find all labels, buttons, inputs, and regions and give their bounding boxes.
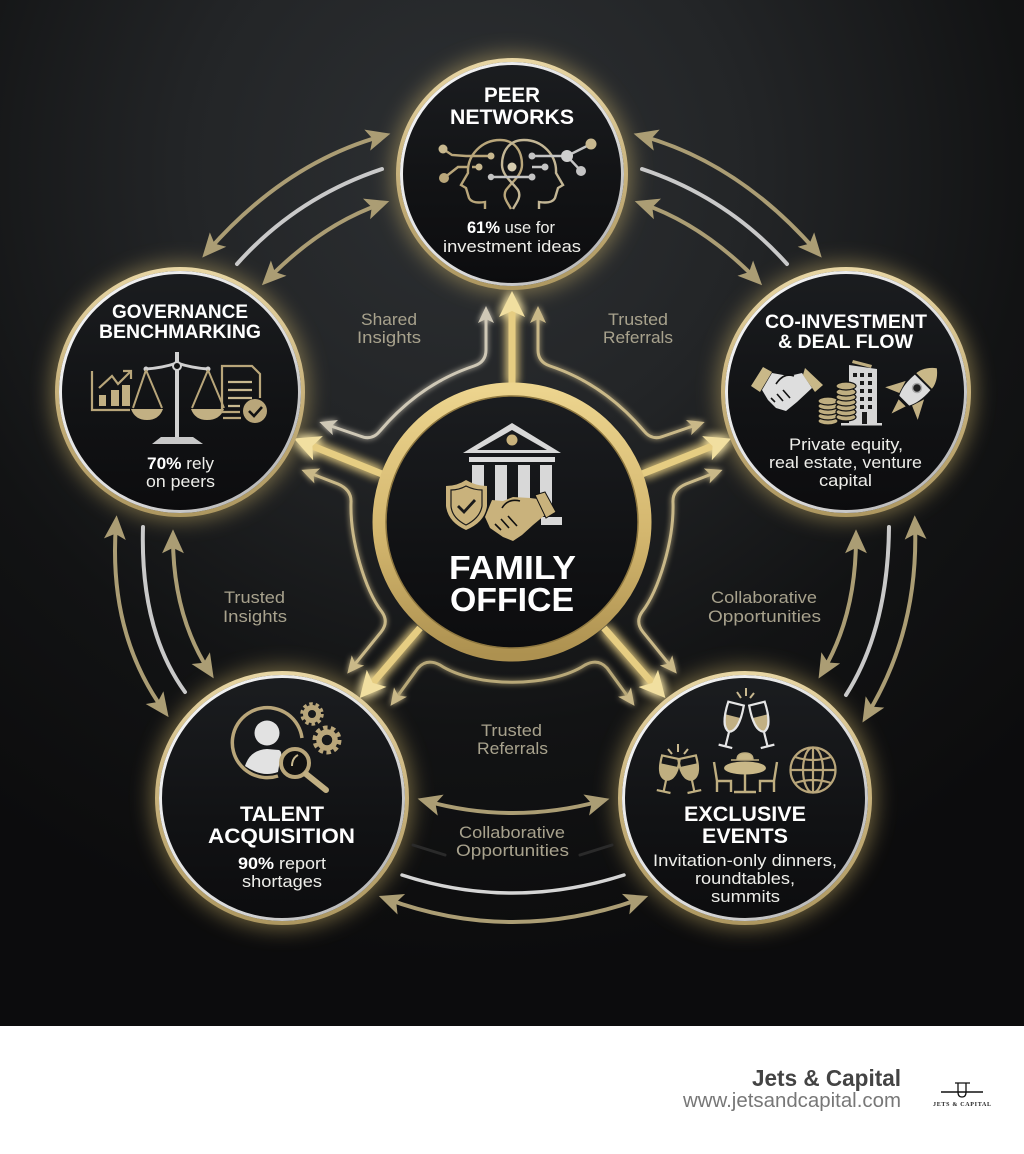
- label: trusted referrals bottom: [477, 722, 548, 758]
- stat: 90%: [238, 855, 326, 891]
- heading: exclusive events: [684, 803, 806, 848]
- icon: office building: [841, 360, 882, 426]
- icon: coin stacks: [818, 382, 856, 425]
- icon: shield with check: [446, 480, 487, 530]
- heading: governance benchmarking: GOVERNANCE: [112, 302, 248, 323]
- panel: family office hub: [380, 390, 644, 654]
- stat: 90%: 90% report: [238, 855, 326, 873]
- stat: 70%: 70% rely: [147, 455, 215, 473]
- label: trusted referrals top: Referrals: [603, 329, 673, 347]
- icon: gold handshake: [485, 492, 556, 541]
- arrows: talent acquisition to exclusive events: [387, 801, 640, 922]
- label: trusted referrals top: Trusted: [608, 311, 668, 329]
- label: trusted insights: Insights: [223, 608, 287, 626]
- footer band: [0, 1026, 1024, 1154]
- secondary arrow: bottom route: [394, 662, 631, 701]
- panel: governance benchmarking: [57, 269, 303, 515]
- secondary arrow: shared insights route: [325, 312, 486, 438]
- panel: co-investment and deal flow: [723, 269, 969, 515]
- heading: co-investment and deal flow: CO-INVESTMENT: [765, 312, 927, 333]
- stat: 61%: 61% use for: [467, 219, 556, 237]
- secondary arrow: trusted referrals route: [538, 312, 699, 438]
- heading: talent acquisition: [208, 803, 355, 848]
- label: trusted referrals bottom: Referrals: [477, 740, 548, 758]
- label: trusted referrals bottom: Trusted: [481, 722, 542, 740]
- heading: talent acquisition: ACQUISITION: [208, 825, 355, 848]
- icon: balance scales: [131, 352, 224, 444]
- text: event types: [653, 852, 837, 906]
- heading: talent acquisition: TALENT: [240, 803, 324, 826]
- heading: exclusive events: EXCLUSIVE: [684, 803, 806, 826]
- icon: handshake: [751, 367, 823, 411]
- panel: peer networks: [398, 60, 626, 288]
- arrows: governance benchmarking to talent acquisition: [115, 524, 209, 710]
- heading: co-investment and deal flow: & DEAL FLOW: [778, 332, 913, 353]
- heading: co-investment and deal flow: [765, 312, 927, 353]
- icon: two heads network: [438, 138, 596, 209]
- icon: document with check: [222, 366, 267, 423]
- icon: person with magnifier and gears: [232, 704, 340, 790]
- label: trusted insights: Trusted: [224, 589, 285, 607]
- stat: 61%: investment ideas: [443, 238, 581, 256]
- heading: exclusive events: EVENTS: [702, 825, 788, 848]
- footer logo: [933, 1083, 991, 1108]
- footer brand text: [682, 1065, 901, 1112]
- panel: exclusive events: [620, 673, 870, 923]
- label: shared insights: Shared: [361, 311, 417, 329]
- heading: peer networks: [450, 84, 574, 129]
- label: collaborative opportunities right: [708, 589, 821, 626]
- arrows: peer networks to co-investment: [642, 136, 816, 279]
- icon: rocket: [875, 352, 953, 430]
- stat: 61%: [443, 219, 581, 256]
- label: shared insights: [357, 311, 421, 347]
- label: collaborative opportunities right: Opportunities: [708, 608, 821, 626]
- text: event types: Invitation-only dinners,: [653, 852, 837, 870]
- connection labels: [223, 311, 821, 860]
- text: asset classes: Private equity,: [789, 436, 903, 454]
- text: asset classes: capital: [819, 472, 872, 490]
- main gold arrows from family office: [305, 303, 720, 689]
- label: collaborative opportunities bottom: [456, 824, 569, 860]
- circle glows: [52, 55, 974, 928]
- panel: talent acquisition: [157, 673, 407, 923]
- label: shared insights: Insights: [357, 329, 421, 347]
- footer brand text: www.jetsandcapital.com: [682, 1090, 901, 1112]
- heading: governance benchmarking: [99, 302, 261, 343]
- label: collaborative opportunities right: Collaborative: [711, 589, 817, 607]
- icon: bar chart: [92, 371, 131, 410]
- stat: 70%: on peers: [146, 473, 215, 491]
- heading: governance benchmarking: BENCHMARKING: [99, 322, 261, 343]
- stat: 70%: [146, 455, 215, 491]
- text: asset classes: [769, 436, 922, 490]
- label: trusted insights: [223, 589, 287, 626]
- footer brand text: Jets & Capital: [752, 1065, 901, 1091]
- label: collaborative opportunities bottom: Opportunities: [456, 842, 569, 860]
- arrows: peer networks to governance benchmarking: [208, 136, 382, 279]
- secondary arrow: right route: [639, 472, 717, 669]
- title: family office: [449, 549, 576, 618]
- icon: wine glasses: [655, 744, 703, 793]
- stat: 90%: shortages: [242, 873, 322, 891]
- text: asset classes: real estate, venture: [769, 454, 922, 472]
- icon: temple: [463, 423, 562, 525]
- label: collaborative opportunities bottom: Collaborative: [459, 824, 565, 842]
- secondary arrow: left route: [307, 472, 385, 669]
- heading: peer networks: PEER: [484, 84, 540, 107]
- text: event types: roundtables,: [695, 870, 795, 888]
- label: trusted referrals top: [603, 311, 673, 347]
- icon: globe: [790, 747, 836, 793]
- title: family office: OFFICE: [450, 581, 574, 618]
- icon: champagne toast: [717, 688, 776, 748]
- title: family office: FAMILY: [449, 549, 576, 586]
- icon: dining table: [714, 753, 777, 792]
- heading: peer networks: NETWORKS: [450, 106, 574, 129]
- text: event types: summits: [711, 888, 780, 906]
- arrows: co-investment to exclusive events: [823, 524, 915, 715]
- footer logo: JETS & CAPITAL: [933, 1102, 991, 1108]
